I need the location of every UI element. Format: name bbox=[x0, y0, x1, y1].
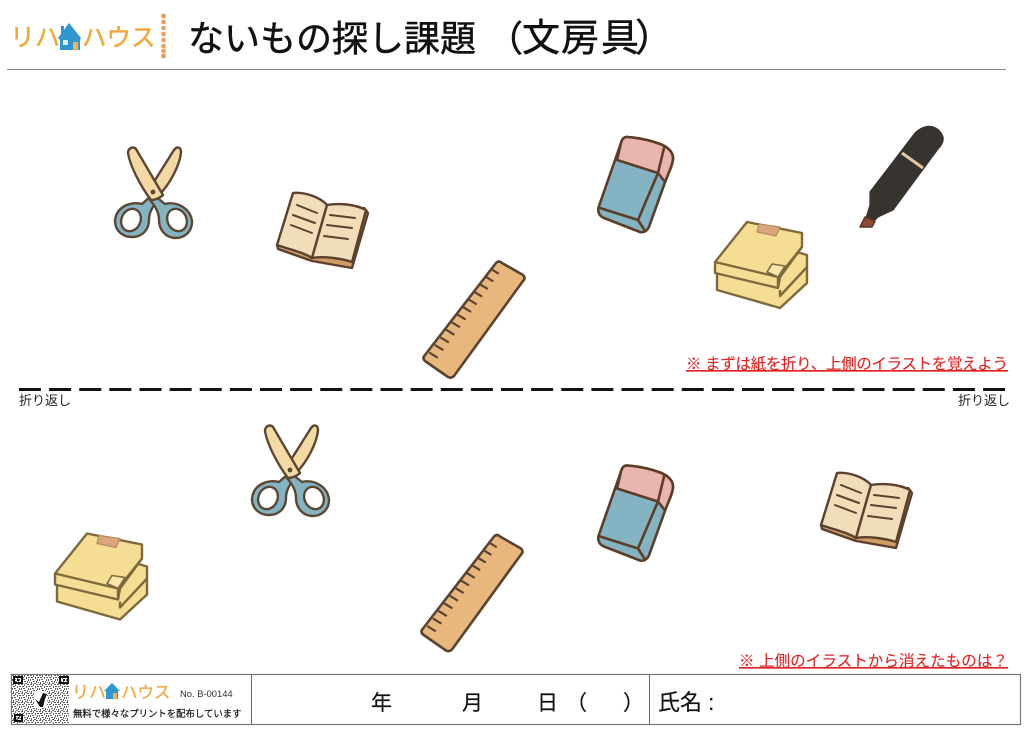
icon: scissors (bottom) bbox=[252, 426, 329, 516]
QR code bbox=[12, 675, 69, 724]
icon: book (bottom) bbox=[821, 473, 912, 548]
date field: （ bbox=[566, 692, 587, 715]
logo: rehab house header bbox=[10, 23, 156, 52]
logo: rehab house header: リハ bbox=[10, 24, 60, 52]
icon: scissors (top) bbox=[115, 148, 192, 238]
instruction: memorize: ※ まずは紙を折り、上側のイラストを覚えよう bbox=[686, 355, 1008, 373]
title: ） bbox=[635, 18, 673, 60]
title bbox=[188, 18, 673, 60]
logo: rehab house header: ハウス bbox=[82, 25, 156, 52]
date field: 月 bbox=[462, 692, 483, 715]
icon: sticky notes (top) bbox=[715, 222, 807, 308]
title: 具 bbox=[601, 18, 639, 60]
fold label right: 折り返し bbox=[958, 393, 1010, 408]
date field bbox=[371, 692, 644, 715]
footer logo: ハウス bbox=[121, 683, 170, 702]
title: ないもの探し課題 bbox=[188, 18, 476, 59]
date field: ） bbox=[623, 692, 644, 715]
icon: ruler (bottom) bbox=[422, 535, 522, 651]
name field: 氏名 : bbox=[658, 690, 714, 715]
footer logo bbox=[72, 683, 170, 702]
decorative dotted separator bbox=[161, 14, 166, 58]
fold line bbox=[19, 388, 1005, 391]
footer table bbox=[12, 674, 1020, 724]
icon: marker bbox=[860, 126, 943, 227]
icon: ruler (top) bbox=[424, 262, 524, 378]
icon: house bbox=[58, 23, 81, 50]
date field: 年 bbox=[371, 692, 392, 715]
product number: No. B-00144 bbox=[180, 688, 233, 699]
icon: eraser (bottom) bbox=[598, 466, 673, 561]
title: （ bbox=[487, 18, 523, 59]
icon: sticky notes (bottom) bbox=[55, 534, 147, 620]
fold label left: 折り返し bbox=[19, 393, 71, 408]
title: 房 bbox=[561, 18, 599, 60]
tagline: 無料で様々なプリントを配布しています bbox=[73, 708, 241, 719]
date field: 日 bbox=[537, 692, 558, 715]
footer logo: リハ bbox=[72, 683, 106, 702]
icon: eraser (top) bbox=[598, 137, 673, 232]
icon: book (top) bbox=[277, 193, 368, 268]
title: 文 bbox=[522, 18, 560, 60]
instruction: question: ※ 上側のイラストから消えたものは？ bbox=[739, 652, 1008, 670]
